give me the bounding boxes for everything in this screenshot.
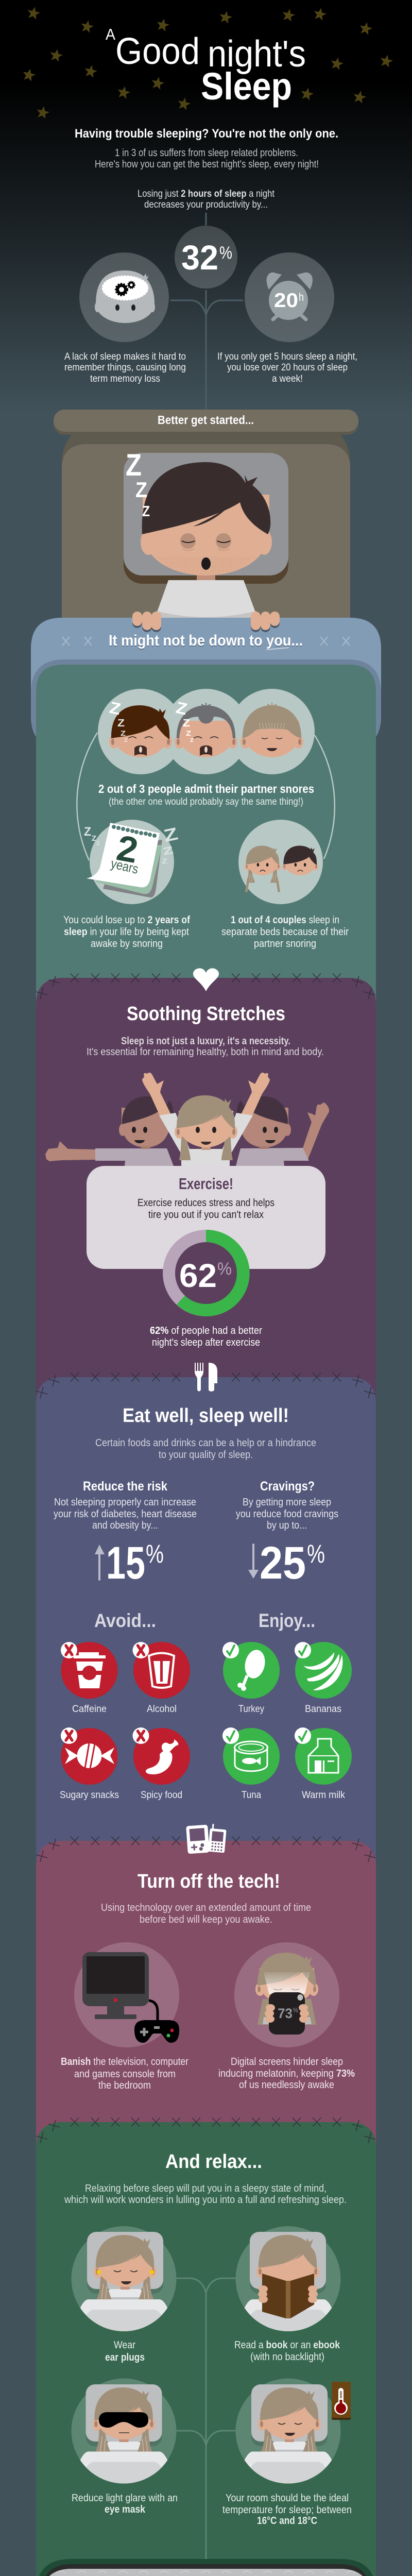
block: cravings: By getting more sleep	[243, 1497, 331, 1508]
snoring stat text: 2 out of 3 people admit their partner snores	[98, 782, 314, 795]
icon: spicy food	[133, 1727, 190, 1785]
icon: woman with phone	[234, 1942, 339, 2047]
donut chart: 62%: 62	[179, 1257, 217, 1294]
tech captions: Digital screens hinder sleep	[231, 2056, 343, 2067]
snore Zs on heads: Z	[190, 738, 194, 743]
panel: eat well	[36, 1372, 376, 1880]
title: Sleep	[201, 65, 292, 108]
block: reduce the risk: your risk of diabetes, heart disease	[54, 1509, 197, 1520]
snore Zs on heads: Z	[121, 729, 126, 737]
sleeper captions bottom: eye mask	[105, 2504, 146, 2515]
panel: snoring	[36, 665, 376, 1030]
sleeper captions top: Read a book or an ebook	[234, 2340, 340, 2351]
donut chart: 62%: %	[217, 1259, 232, 1279]
sleeper captions bottom: temperature for sleep; between	[222, 2504, 352, 2516]
snoring captions: You could lose up to 2 years of	[63, 914, 190, 926]
title	[106, 25, 306, 108]
heading: soothing stretches: Soothing Stretches	[127, 1003, 285, 1025]
block: reduce the risk: and obesity by...	[92, 1520, 158, 1531]
icon: woman with phone: %	[293, 2006, 298, 2014]
stat: 32%: %	[219, 243, 232, 263]
snoring captions: separate beds because of their	[221, 926, 349, 938]
panel: turn off the tech	[36, 1836, 376, 2164]
tech captions: the bedroom	[98, 2080, 151, 2091]
food labels row one: Bananas	[305, 1704, 341, 1715]
sleeping Zs: Z	[126, 448, 142, 482]
sleeper captions bottom: Reduce light glare with an	[72, 2493, 178, 2504]
icon: warm milk	[295, 1727, 352, 1785]
snoring captions: awake by snoring	[91, 938, 163, 950]
intro text	[75, 127, 338, 210]
icon: calendar 2 years: 2	[114, 827, 141, 871]
food labels row one: Alcohol	[147, 1704, 177, 1715]
intro text: decreases your productivity by...	[144, 199, 268, 210]
panel: and relax	[36, 2117, 376, 2576]
heading: turn off the tech: before bed will keep you awake.	[140, 1914, 272, 1925]
mattress panel	[36, 2559, 376, 2576]
heading: soothing stretches: It's essential for remaining healthy, both in mind and body.	[87, 1046, 324, 1058]
snoring stat text: (the other one would probably say the same thing!)	[109, 796, 303, 807]
avoid and enjoy headings: Avoid...	[94, 1610, 156, 1631]
heading: and relax: And relax...	[165, 2151, 262, 2173]
food labels row two: Spicy food	[141, 1790, 182, 1801]
icon: alarm clock: 20	[274, 290, 298, 312]
panel: soothing stretches	[36, 974, 376, 1417]
heading: soothing stretches	[87, 1003, 324, 1058]
icon: calendar 2 years: Z	[162, 857, 168, 865]
icon: calendar 2 years	[84, 820, 180, 904]
snoring stat text	[98, 782, 314, 807]
food labels row two: Sugary snacks	[60, 1790, 119, 1801]
block: reduce the risk	[54, 1479, 197, 1588]
tech captions: Banish the television, computer	[61, 2056, 188, 2067]
icon: caffeine	[61, 1642, 117, 1699]
icon: calendar 2 years: Z	[162, 844, 174, 858]
icon: calendar 2 years: years	[109, 856, 140, 877]
bed headboard	[62, 432, 350, 618]
sleeper: ear plugs	[71, 2226, 176, 2335]
icon: calendar 2 years: Z	[162, 824, 180, 846]
stat captions: term memory loss	[90, 374, 160, 384]
heading: eat well	[95, 1405, 316, 1461]
avoid and enjoy headings: Enjoy...	[259, 1610, 315, 1631]
food labels row one: Turkey	[238, 1704, 264, 1715]
block: reduce the risk: %	[146, 1539, 164, 1568]
icon: calendar 2 years: Z	[92, 834, 96, 843]
exercise caption: 62% of people had a better	[150, 1325, 262, 1336]
heading: and relax: which will work wonders in lulling you into a full and refreshing sleep.	[64, 2194, 347, 2206]
snoring captions	[63, 914, 349, 950]
sleeping Zs: Z	[142, 503, 150, 520]
tech captions: of us needlessly awake	[239, 2079, 334, 2091]
tech captions	[61, 2056, 355, 2091]
block: cravings	[236, 1479, 338, 1588]
stars	[22, 6, 394, 120]
food labels row one	[72, 1704, 341, 1715]
exercise caption	[150, 1325, 262, 1348]
intro text: Having trouble sleeping? You're not the only one.	[75, 127, 338, 141]
icon: alarm clock: h	[299, 291, 304, 303]
stat captions: A lack of sleep makes it hard to	[64, 351, 186, 362]
snore Zs on heads: Z	[124, 738, 128, 743]
intro text: 1 in 3 of us suffers from sleep related problems.	[115, 147, 298, 159]
avoid and enjoy headings	[94, 1610, 315, 1631]
heading: it might not be down to you: It might not be down to you...	[109, 632, 303, 649]
block: cravings: by up to...	[267, 1520, 307, 1531]
icon: alarm clock	[245, 252, 334, 342]
snore Zs on heads	[108, 698, 194, 743]
sleeper: ideal temperature	[236, 2378, 341, 2487]
icon: bananas	[295, 1642, 352, 1699]
title: night's	[208, 33, 306, 75]
sleeper captions top: ear plugs	[105, 2352, 145, 2363]
sleeper: book	[236, 2226, 341, 2335]
sleeper captions top: (with no backlight)	[250, 2351, 324, 2363]
sleeping man	[124, 453, 288, 618]
snoring captions: partner snoring	[254, 938, 316, 950]
food labels row two: Warm milk	[302, 1790, 345, 1801]
icon: unhappy couple	[238, 820, 323, 904]
icon: tv and games console	[74, 1942, 179, 2047]
icon: woman with phone: 73	[278, 2006, 293, 2021]
icon: alcohol	[133, 1642, 190, 1699]
sleeping Zs: Z	[135, 478, 147, 502]
snore Zs on heads: Z	[108, 698, 123, 718]
intro text: Losing just 2 hours of sleep a night	[138, 189, 275, 199]
snore Zs on heads: Z	[186, 729, 192, 737]
stat captions: If you only get 5 hours sleep a night,	[217, 351, 357, 362]
food labels row two: Tuna	[242, 1790, 261, 1801]
block: cravings: Cravings?	[260, 1479, 315, 1494]
banner: better get started: Better get started...	[158, 413, 254, 427]
icon: turkey	[222, 1642, 280, 1699]
sleeper captions top: Wear	[114, 2340, 135, 2351]
three snoring heads	[109, 703, 303, 757]
tech captions: and games console from	[74, 2069, 176, 2080]
blanket	[31, 618, 381, 737]
exercise card: Exercise!	[179, 1175, 233, 1193]
food labels row one: Caffeine	[72, 1704, 107, 1715]
stat captions: remember things, causing long	[64, 362, 186, 373]
sleeping Zs	[126, 448, 150, 520]
intro text: Here's how you can get the best night's sleep, every night!	[95, 159, 319, 170]
hands on blanket	[132, 612, 280, 632]
tech captions: inducing melatonin, keeping 73%	[218, 2068, 355, 2079]
sleeper: eye mask	[71, 2378, 176, 2487]
stat captions: you lose over 20 hours of sleep	[227, 362, 348, 373]
icon: fork and knife	[195, 1363, 217, 1392]
icon: thermometer	[332, 2382, 351, 2420]
food labels row two	[60, 1790, 345, 1801]
snore Zs on heads: Z	[175, 698, 189, 718]
snoring captions: 1 out of 4 couples sleep in	[231, 914, 339, 926]
heading: turn off the tech: Using technology over an extended amount of time	[101, 1902, 311, 1913]
title: A	[106, 25, 115, 43]
icon: calendar 2 years: Z	[96, 841, 100, 846]
icon: handheld console and phone	[186, 1824, 227, 1854]
connector lines	[170, 213, 243, 410]
heading: eat well: Eat well, sleep well!	[123, 1405, 289, 1427]
icon: heart	[193, 968, 219, 991]
banner: better get started	[54, 410, 358, 435]
exercise card: tire you out if you can't relax	[148, 1209, 264, 1221]
heading: eat well: to your quality of sleep.	[159, 1449, 253, 1461]
stat: 32%: 32	[181, 239, 218, 277]
heading: turn off the tech: Turn off the tech!	[138, 1871, 280, 1892]
stat captions	[64, 351, 357, 384]
sleeper captions top	[105, 2340, 340, 2363]
exercise card: Exercise reduces stress and helps	[138, 1197, 274, 1209]
icon: calendar 2 years: Z	[84, 825, 91, 839]
block: cravings: you reduce food cravings	[236, 1509, 338, 1520]
heading: eat well: Certain foods and drinks can be a help or a hindrance	[95, 1437, 316, 1449]
figures stretching	[45, 1073, 329, 1166]
block: reduce the risk: Not sleeping properly can increase	[54, 1497, 196, 1508]
block: reduce the risk: 15	[106, 1537, 145, 1588]
heading: turn off the tech	[101, 1871, 311, 1925]
icon: sugary snacks	[61, 1727, 117, 1785]
icon: head with gears	[79, 252, 169, 342]
exercise card	[87, 1166, 325, 1269]
sleeper captions bottom	[72, 2493, 352, 2527]
connector lines	[176, 2278, 236, 2559]
exercise caption: night's sleep after exercise	[152, 1337, 260, 1348]
sleeper captions bottom: Your room should be the ideal	[226, 2493, 349, 2504]
block: cravings: %	[307, 1539, 325, 1568]
sleeper captions bottom: 16°C and 18°C	[257, 2515, 317, 2527]
block: cravings: 25	[260, 1537, 306, 1588]
stat captions: a week!	[272, 374, 303, 384]
heading: soothing stretches: Sleep is not just a luxury, it's a necessity.	[121, 1036, 290, 1047]
icon: tuna	[222, 1727, 280, 1785]
title: Good	[115, 31, 200, 72]
snore Zs on heads: Z	[183, 718, 190, 729]
heading: and relax: Relaxing before sleep will put you in a sleepy state of mind,	[85, 2183, 327, 2194]
block: reduce the risk: Reduce the risk	[83, 1479, 167, 1494]
donut chart: 62%	[163, 1230, 250, 1316]
heading: and relax	[64, 2151, 347, 2206]
snore Zs on heads: Z	[117, 718, 125, 729]
snoring captions: sleep in your life by being kept	[64, 926, 189, 938]
stat: 32%	[175, 226, 237, 289]
